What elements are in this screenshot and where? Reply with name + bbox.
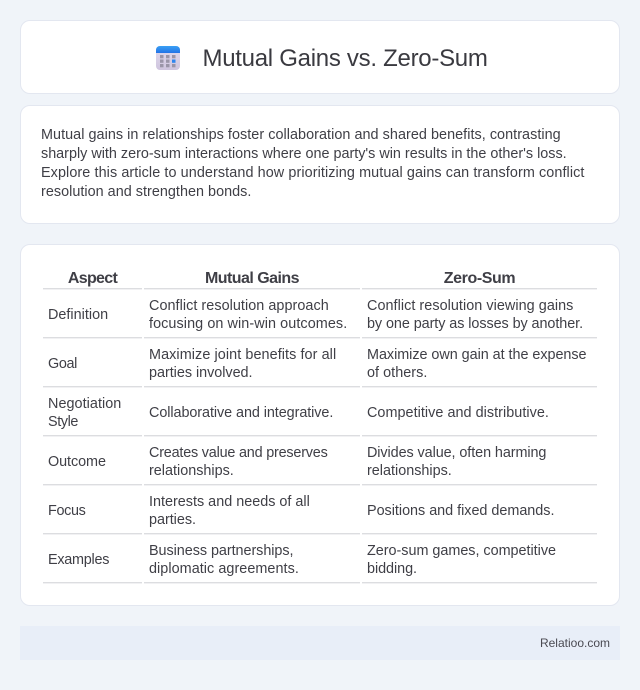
intro text: Explore this article to understand how prioritizing mutual gains can transform conflict [41, 165, 584, 181]
row: Outcome: relationships. [367, 463, 452, 479]
row: Examples: Examples [48, 552, 109, 568]
intro text [41, 127, 584, 200]
comparison table [43, 270, 597, 584]
row: Focus [48, 494, 554, 528]
row: Definition: Definition [48, 307, 108, 323]
row: Goal: of others. [367, 365, 427, 381]
row: Examples: bidding. [367, 561, 417, 577]
row: Outcome: relationships. [149, 463, 234, 479]
row: Focus: Focus [48, 503, 86, 519]
footer text: Relatioo.com [540, 636, 610, 650]
row: Focus: Interests and needs of all [149, 494, 310, 510]
intro text: sharply with zero-sum interactions where one party's win results in the other's loss. [41, 146, 567, 162]
row: Goal: Maximize joint benefits for all [149, 347, 336, 363]
row: Examples [48, 543, 556, 577]
icon: calendar [156, 46, 180, 70]
panel: intro card [20, 105, 620, 224]
row: Definition: focusing on win-win outcomes. [149, 316, 347, 332]
row: Definition: Conflict resolution viewing gains [367, 298, 573, 314]
row: Examples: Business partnerships, [149, 543, 293, 559]
table header: Mutual Gains: Mutual Gains [205, 270, 299, 287]
row: Examples: diplomatic agreements. [149, 561, 299, 577]
row: Negotiation Style: Style [48, 414, 78, 430]
row: Examples: Zero-sum games, competitive [367, 543, 556, 559]
row: Outcome: Divides value, often harming [367, 445, 546, 461]
row: Negotiation Style: Negotiation [48, 396, 121, 412]
row: Focus: parties. [149, 512, 196, 528]
footer bar [20, 626, 620, 660]
row: Definition: Conflict resolution approach [149, 298, 329, 314]
row: Goal: Goal [48, 356, 77, 372]
row: Focus: Positions and fixed demands. [367, 503, 554, 519]
row: Negotiation Style [48, 396, 549, 430]
row: Outcome: Creates value and preserves [149, 445, 328, 461]
row: Negotiation Style: Competitive and distributive. [367, 405, 549, 421]
row: Definition [48, 298, 583, 332]
table header: Aspect: Aspect [68, 270, 117, 287]
row: Goal: Maximize own gain at the expense [367, 347, 586, 363]
panel: title card [20, 20, 620, 94]
title: Mutual Gains vs. Zero-Sum [202, 45, 488, 72]
intro text: resolution and strengthen bonds. [41, 184, 251, 200]
intro text: Mutual gains in relationships foster collaboration and shared benefits, contrasting [41, 127, 561, 143]
table header: Zero-Sum: Zero-Sum [444, 270, 515, 287]
row: Goal: parties involved. [149, 365, 252, 381]
row: Definition: by one party as losses by another. [367, 316, 583, 332]
row: Negotiation Style: Collaborative and integrative. [149, 405, 333, 421]
row: Goal [48, 347, 586, 381]
panel: comparison table card [20, 244, 620, 606]
row: Outcome: Outcome [48, 454, 106, 470]
row: Outcome [48, 445, 546, 479]
